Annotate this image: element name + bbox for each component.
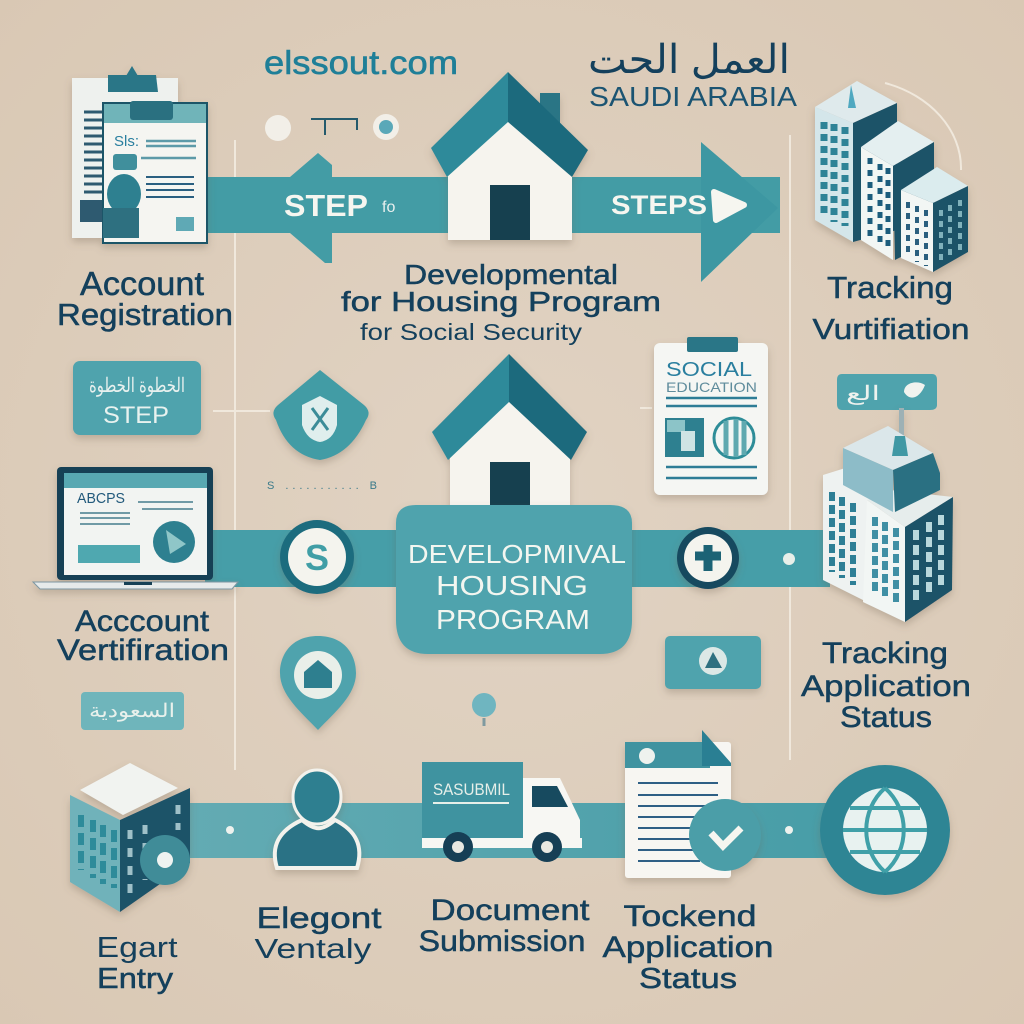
label: tracking application status: Status bbox=[840, 701, 932, 734]
icon: person bbox=[275, 770, 359, 868]
label: egart entry bbox=[96, 932, 178, 995]
middle band bbox=[205, 530, 830, 587]
icon: small pin bbox=[472, 693, 496, 726]
label: account verification: Acccount bbox=[75, 605, 210, 638]
small top icons bbox=[265, 114, 399, 141]
arabic tag: السعودية bbox=[89, 701, 175, 722]
small badge top right bbox=[837, 374, 937, 410]
icon: document with check bbox=[625, 730, 761, 878]
label: document submission: Document bbox=[430, 894, 590, 927]
label: account registration: Registration bbox=[57, 297, 233, 332]
label: tockend application status: Tockend bbox=[624, 900, 756, 933]
label: account verification bbox=[57, 605, 229, 667]
small badge top right: الع bbox=[846, 383, 880, 405]
label: document submission bbox=[418, 894, 590, 958]
label: document submission: Submission bbox=[418, 925, 586, 958]
icon: map pin bbox=[280, 636, 356, 730]
icon: social document bbox=[654, 337, 768, 495]
step labels on arrow: fo bbox=[382, 199, 395, 216]
label: elegant ventaly: Elegont bbox=[256, 902, 382, 935]
label: tracking verification: Tracking bbox=[827, 270, 953, 305]
label: account registration: Account bbox=[80, 265, 204, 302]
icon: laptop bbox=[33, 467, 238, 589]
icon: house top bbox=[431, 72, 588, 240]
label: tracking application status: Application bbox=[801, 670, 971, 703]
center title: for Social Security bbox=[360, 319, 583, 345]
step labels on arrow bbox=[284, 188, 744, 223]
label: tracking verification: Vurtifiation bbox=[812, 314, 970, 346]
label: tracking application status bbox=[801, 637, 971, 734]
icon: globe bbox=[820, 765, 950, 895]
icon: dot near document bbox=[785, 826, 793, 834]
icon: social document: EDUCATION bbox=[666, 379, 757, 395]
header: Arabic and Saudi Arabia: العمل الحت bbox=[588, 38, 790, 82]
step badge bbox=[73, 361, 201, 435]
icon: small camera badge bbox=[665, 636, 761, 689]
panel: developmental housing program: DEVELOPMIVAL bbox=[408, 539, 626, 569]
icon: towers top right bbox=[815, 81, 968, 272]
label: elegant ventaly bbox=[254, 902, 382, 964]
center title: Developmental bbox=[404, 259, 618, 290]
step labels on arrow: STEPS bbox=[611, 190, 707, 220]
icon: delivery truck: SASUBMIL bbox=[433, 780, 510, 799]
label: egart entry: Egart bbox=[96, 932, 178, 964]
label: tockend application status bbox=[602, 900, 774, 995]
icon: laptop: ABCPS bbox=[77, 490, 125, 507]
icon: building cube bottom-left bbox=[70, 763, 190, 912]
step badge: الخطوة الخطوة bbox=[89, 375, 185, 397]
icon: shield bbox=[273, 370, 369, 460]
panel: developmental housing program: PROGRAM bbox=[436, 604, 590, 635]
label: account verification: Vertifiration bbox=[57, 634, 229, 667]
label: tockend application status: Status bbox=[639, 963, 737, 995]
icon: building right middle bbox=[823, 408, 953, 622]
icon: delivery truck bbox=[422, 762, 582, 862]
icon: clipboard document top-left bbox=[72, 66, 207, 243]
center title bbox=[341, 259, 661, 345]
icon: dot on band bbox=[783, 553, 795, 565]
icon: S circle bbox=[280, 520, 354, 594]
label: tracking verification bbox=[812, 270, 970, 346]
icon: clipboard document top-left: Sls: bbox=[114, 133, 139, 150]
label: egart entry: Entry bbox=[97, 963, 174, 995]
step badge: STEP bbox=[103, 402, 169, 429]
panel: developmental housing program: HOUSING bbox=[436, 570, 588, 601]
label: tracking application status: Tracking bbox=[822, 637, 948, 670]
band dots bbox=[226, 826, 234, 834]
step labels on arrow: STEP bbox=[284, 188, 368, 223]
label: account registration bbox=[57, 265, 233, 332]
label: elegant ventaly: Ventaly bbox=[254, 933, 372, 964]
bottom band bbox=[190, 803, 850, 858]
top arrow band bbox=[207, 142, 780, 282]
center title: for Housing Program bbox=[341, 286, 661, 317]
small caption under shield: S ........... B bbox=[267, 480, 377, 492]
panel: developmental housing program bbox=[396, 505, 632, 654]
header: Arabic and Saudi Arabia bbox=[588, 38, 797, 112]
icon: house center bbox=[432, 354, 587, 530]
icon: S circle: S bbox=[305, 537, 329, 578]
header: Arabic and Saudi Arabia: SAUDI ARABIA bbox=[589, 81, 797, 112]
icon: social document: SOCIAL bbox=[666, 359, 752, 381]
icon: plus circle bbox=[677, 527, 739, 589]
arabic tag bbox=[81, 692, 184, 730]
label: tockend application status: Application bbox=[602, 931, 774, 964]
logo text: website: elssout.com bbox=[264, 44, 458, 81]
